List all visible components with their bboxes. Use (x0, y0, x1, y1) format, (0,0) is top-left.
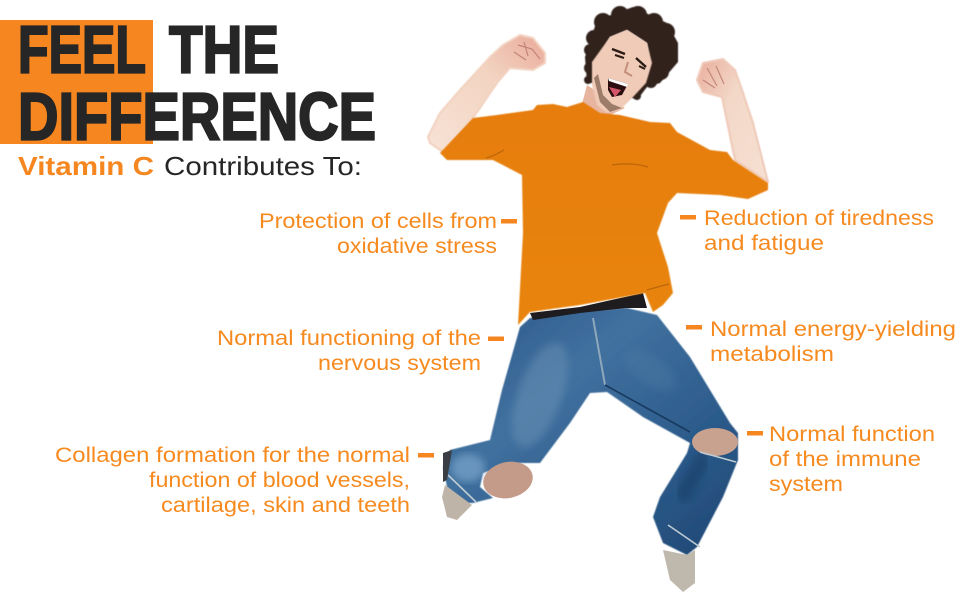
subtitle: Contributes To: (164, 151, 362, 181)
jeans (443, 308, 738, 555)
callout: nervous system: nervous system (318, 352, 481, 375)
callout: collagen: function of blood vessels, (149, 469, 410, 492)
brows and eyes (612, 49, 646, 67)
right arm (697, 59, 768, 182)
callout: collagen: cartilage, skin and teeth (161, 494, 410, 517)
callout: cells: oxidative stress (337, 235, 497, 258)
shirt shading (486, 150, 669, 290)
callout: immune system: Normal function (769, 423, 935, 446)
title (18, 12, 376, 154)
title: THE (169, 12, 279, 88)
left knee (480, 457, 536, 503)
t-shirt (440, 102, 768, 325)
subtitle: Vitamin C (18, 151, 154, 181)
callout: energy metabolism (686, 318, 956, 366)
title: FEEL (18, 12, 146, 88)
denim highlights (501, 336, 579, 454)
left shoe (442, 485, 472, 520)
right knee (692, 428, 738, 456)
subtitle (18, 151, 362, 181)
belt (530, 293, 647, 320)
callout: energy metabolism: metabolism (710, 343, 834, 366)
callout: collagen: Collagen formation for the normal (55, 444, 410, 467)
neck (582, 85, 625, 118)
face (592, 30, 652, 113)
hands shading (514, 42, 724, 88)
eyes (615, 55, 645, 69)
title: DIFFERENCE (18, 80, 376, 154)
callout: cells (259, 210, 517, 258)
callout: immune system: system (769, 473, 843, 496)
dark shoe top (443, 450, 452, 482)
right shoe (663, 550, 695, 592)
stubble (594, 74, 622, 112)
cuff fraying (448, 452, 736, 547)
callout: cells: Protection of cells from (259, 210, 497, 233)
left arm (428, 35, 545, 152)
hair (584, 6, 678, 100)
callout: nervous system: Normal functioning of the (217, 327, 481, 350)
nose (625, 62, 632, 76)
callout: tiredness (680, 207, 934, 255)
mouth (608, 78, 628, 97)
callout: tiredness: and fatigue (704, 232, 824, 255)
orange title block (0, 20, 153, 144)
callout: energy metabolism: Normal energy-yielding (710, 318, 956, 341)
callout: immune system (747, 423, 935, 496)
callout: collagen (55, 444, 434, 517)
callout: nervous system (217, 327, 504, 375)
callout: immune system: of the immune (769, 448, 921, 471)
callout: tiredness: Reduction of tiredness (704, 207, 934, 230)
fly seam (593, 318, 605, 385)
jumping man in orange t-shirt (428, 6, 768, 592)
